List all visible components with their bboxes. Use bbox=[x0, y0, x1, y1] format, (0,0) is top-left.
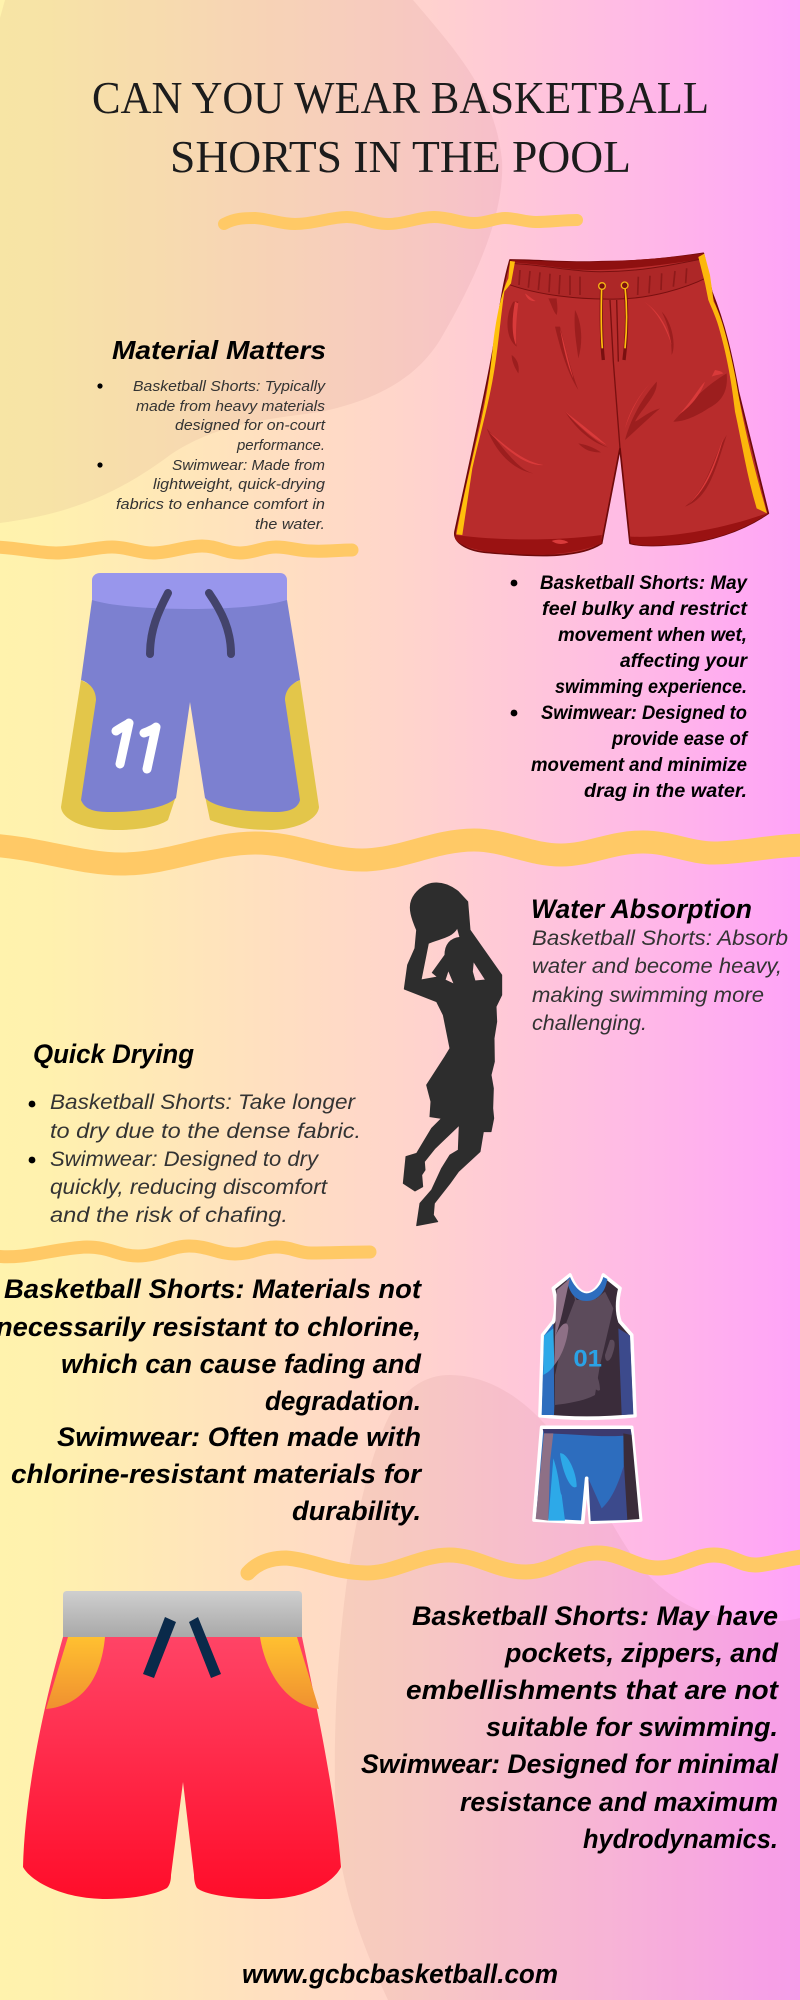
bullet list: lightweight, quick-drying bbox=[153, 476, 326, 493]
section: bulk and movement list: Swimwear: Designed to bbox=[541, 703, 747, 724]
section: chlorine text: Swimwear: Often made with bbox=[57, 1422, 421, 1452]
dark folds bbox=[487, 298, 727, 507]
section: water absorption bbox=[531, 894, 788, 1035]
shorts body bbox=[455, 253, 768, 556]
bullet list bbox=[97, 378, 327, 533]
jersey bbox=[540, 1275, 635, 1418]
section: pockets and zippers text: resistance and maximum bbox=[460, 1787, 778, 1817]
section: bulk and movement list: affecting your bbox=[620, 651, 749, 672]
center seam bbox=[610, 300, 620, 448]
light folds bbox=[488, 293, 723, 544]
right pocket bbox=[260, 1637, 319, 1709]
wavy divider 4 bbox=[0, 1246, 370, 1257]
section: chlorine text: degradation. bbox=[265, 1386, 421, 1416]
bullet list: to dry due to the dense fabric. bbox=[50, 1120, 361, 1143]
shorts body bbox=[81, 600, 300, 812]
background blob: top left bbox=[0, 0, 502, 523]
section: bulk and movement list: Basketball Shorts: May bbox=[540, 573, 748, 594]
inner waist bbox=[512, 253, 703, 270]
section: pockets and zippers text: embellishments that are not bbox=[406, 1675, 779, 1705]
illustration: red shorts bbox=[455, 253, 768, 556]
wavy divider 3 bbox=[0, 840, 800, 864]
waistband bbox=[92, 573, 287, 609]
illustration: basketball player silhouette bbox=[403, 883, 502, 1226]
bullet list: fabrics to enhance comfort in bbox=[116, 496, 325, 513]
wavy divider 2 bbox=[0, 546, 352, 553]
heading: Water Absorption bbox=[531, 894, 752, 924]
title bbox=[92, 72, 709, 182]
section: bulk and movement list: movement when wet, bbox=[558, 625, 747, 646]
body text: Basketball Shorts: Absorb bbox=[532, 927, 788, 950]
section: pockets and zippers text: Basketball Shorts: May have bbox=[412, 1601, 778, 1631]
section: pockets and zippers text bbox=[361, 1601, 779, 1854]
body text bbox=[532, 927, 788, 1035]
uniform shorts bbox=[534, 1427, 641, 1522]
left pocket bbox=[46, 1637, 105, 1709]
shorts body bbox=[23, 1637, 341, 1899]
drawstrings bbox=[150, 593, 231, 654]
drawstrings bbox=[601, 287, 603, 360]
yellow trim left bbox=[61, 680, 176, 830]
bullet list: designed for on-court bbox=[175, 417, 326, 434]
section: bulk and movement list: drag in the water. bbox=[584, 781, 747, 802]
bullet list: Basketball Shorts: Typically bbox=[133, 378, 327, 395]
title: CAN YOU WEAR BASKETBALL bbox=[92, 72, 709, 123]
section: quick drying bbox=[29, 1039, 361, 1227]
heading: Material Matters bbox=[112, 335, 326, 365]
waistband ribs bbox=[519, 268, 687, 295]
stripe right bbox=[698, 254, 767, 513]
drawstrings bbox=[143, 1617, 221, 1678]
section: bulk and movement list: swimming experience. bbox=[555, 677, 747, 698]
waistband bbox=[508, 259, 707, 299]
bullet list bbox=[29, 1091, 361, 1227]
bullet list: Swimwear: Made from bbox=[172, 457, 325, 474]
jersey number 01: 01 bbox=[573, 1345, 602, 1372]
bullet list: performance. bbox=[236, 437, 325, 454]
body text: water and become heavy, bbox=[532, 955, 782, 978]
footer website: www.gcbcbasketball.com bbox=[242, 1959, 558, 1989]
body text: making swimming more bbox=[532, 984, 764, 1007]
section: bulk and movement list bbox=[511, 573, 749, 802]
bullet list: made from heavy materials bbox=[136, 398, 326, 415]
bullet list: quickly, reducing discomfort bbox=[50, 1176, 328, 1199]
section: bulk and movement list: feel bulky and restrict bbox=[542, 599, 748, 620]
number 11 bbox=[116, 723, 156, 769]
section: chlorine text: Basketball Shorts: Materials not bbox=[4, 1274, 422, 1304]
section: pockets and zippers text: pockets, zippers, and bbox=[504, 1638, 779, 1668]
illustration: jersey and shorts uniform bbox=[534, 1275, 641, 1522]
stripe left bbox=[456, 261, 515, 535]
section: bulk and movement list: provide ease of bbox=[611, 729, 749, 750]
bullet list: and the risk of chafing. bbox=[50, 1204, 288, 1227]
bullet list: Basketball Shorts: Take longer bbox=[50, 1091, 356, 1114]
section: material matters bbox=[97, 335, 327, 533]
section: chlorine text bbox=[0, 1274, 423, 1526]
section: bulk and movement list: movement and minimize bbox=[531, 755, 747, 776]
illustration: purple shorts bbox=[61, 573, 319, 830]
title: SHORTS IN THE POOL bbox=[170, 131, 631, 182]
section: chlorine text: durability. bbox=[292, 1496, 421, 1526]
illustration: red gradient shorts bbox=[23, 1591, 341, 1899]
wavy divider 5 bbox=[248, 1553, 800, 1573]
background blob: bottom right bbox=[335, 1375, 800, 2000]
wavy divider 1 bbox=[224, 217, 577, 224]
body text: challenging. bbox=[532, 1012, 647, 1035]
section: chlorine text: necessarily resistant to chlorine, bbox=[0, 1312, 421, 1342]
bullet list: Swimwear: Designed to dry bbox=[50, 1148, 320, 1171]
heading: Quick Drying bbox=[33, 1039, 194, 1069]
section: chlorine text: chlorine-resistant materials for bbox=[11, 1459, 423, 1489]
section: pockets and zippers text: suitable for swimming. bbox=[486, 1712, 778, 1742]
hem left bbox=[455, 535, 602, 555]
section: pockets and zippers text: Swimwear: Designed for minimal bbox=[361, 1749, 778, 1779]
waistband bbox=[63, 1591, 302, 1640]
yellow trim right bbox=[205, 680, 319, 830]
section: chlorine text: which can cause fading and bbox=[61, 1349, 421, 1379]
bullet list: the water. bbox=[255, 516, 325, 533]
hem right bbox=[630, 513, 768, 546]
section: pockets and zippers text: hydrodynamics. bbox=[583, 1824, 778, 1854]
